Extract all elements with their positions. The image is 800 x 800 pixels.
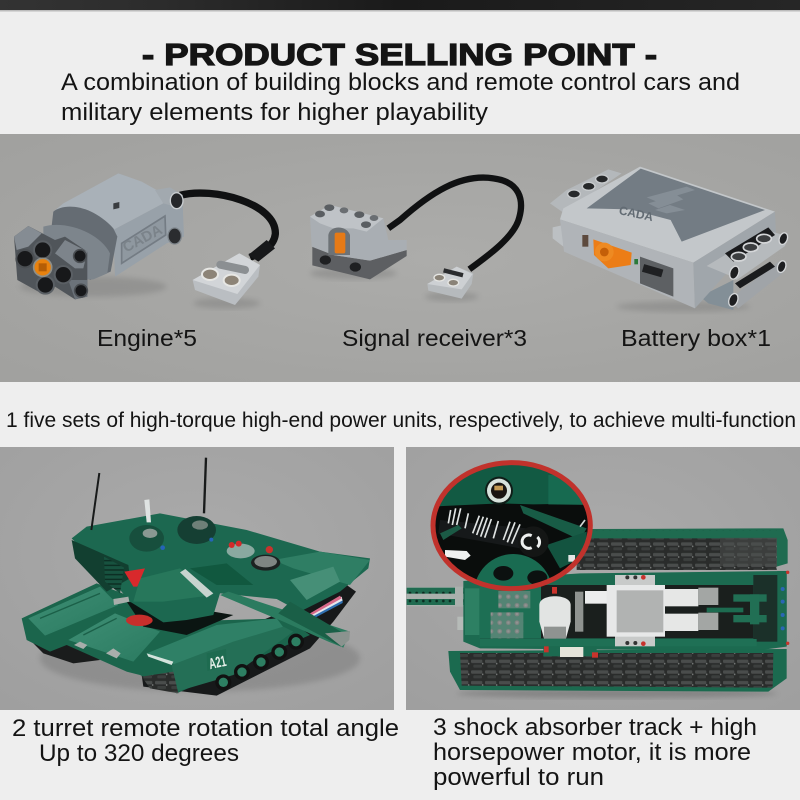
feature 3 text: powerful to run bbox=[433, 764, 604, 791]
intro text: military elements for higher playability bbox=[61, 99, 488, 126]
title: - PRODUCT SELLING POINT - bbox=[142, 37, 657, 72]
icon: signal receiver bbox=[310, 178, 521, 301]
tank illustration bbox=[22, 458, 370, 696]
intro text: A combination of building blocks and remote control cars and bbox=[61, 69, 740, 96]
panel: power components bbox=[0, 134, 800, 382]
label: signal receiver: Signal receiver*3 bbox=[342, 325, 527, 351]
label: battery box: Battery box*1 bbox=[621, 325, 771, 351]
feature 3 text bbox=[433, 714, 757, 791]
feature 3 text: horsepower motor, it is more bbox=[433, 739, 751, 766]
label: engine: Engine*5 bbox=[97, 325, 197, 351]
icon: engine: CADA bbox=[120, 222, 166, 256]
feature 2 text: Up to 320 degrees bbox=[39, 740, 239, 767]
icon: engine bbox=[14, 173, 275, 309]
chassis illustration bbox=[407, 528, 789, 698]
tank illustration: A21 bbox=[207, 653, 228, 673]
panel: chassis with shock absorber detail bbox=[406, 447, 800, 710]
intro text bbox=[61, 69, 740, 126]
icon: battery box bbox=[550, 167, 789, 312]
feature 3 text: 3 shock absorber track + high bbox=[433, 714, 757, 741]
feature 1 text: 1 five sets of high-torque high-end power units, respectively, to achieve multi-function bbox=[6, 409, 796, 432]
panel: assembled tank bbox=[0, 447, 394, 710]
icon: battery box: CADA bbox=[618, 203, 655, 224]
feature 2 text bbox=[12, 715, 399, 767]
cannon barrel bbox=[407, 587, 464, 630]
callout: magnified shock absorber bbox=[430, 460, 593, 592]
feature 2 text: 2 turret remote rotation total angle bbox=[12, 715, 399, 742]
